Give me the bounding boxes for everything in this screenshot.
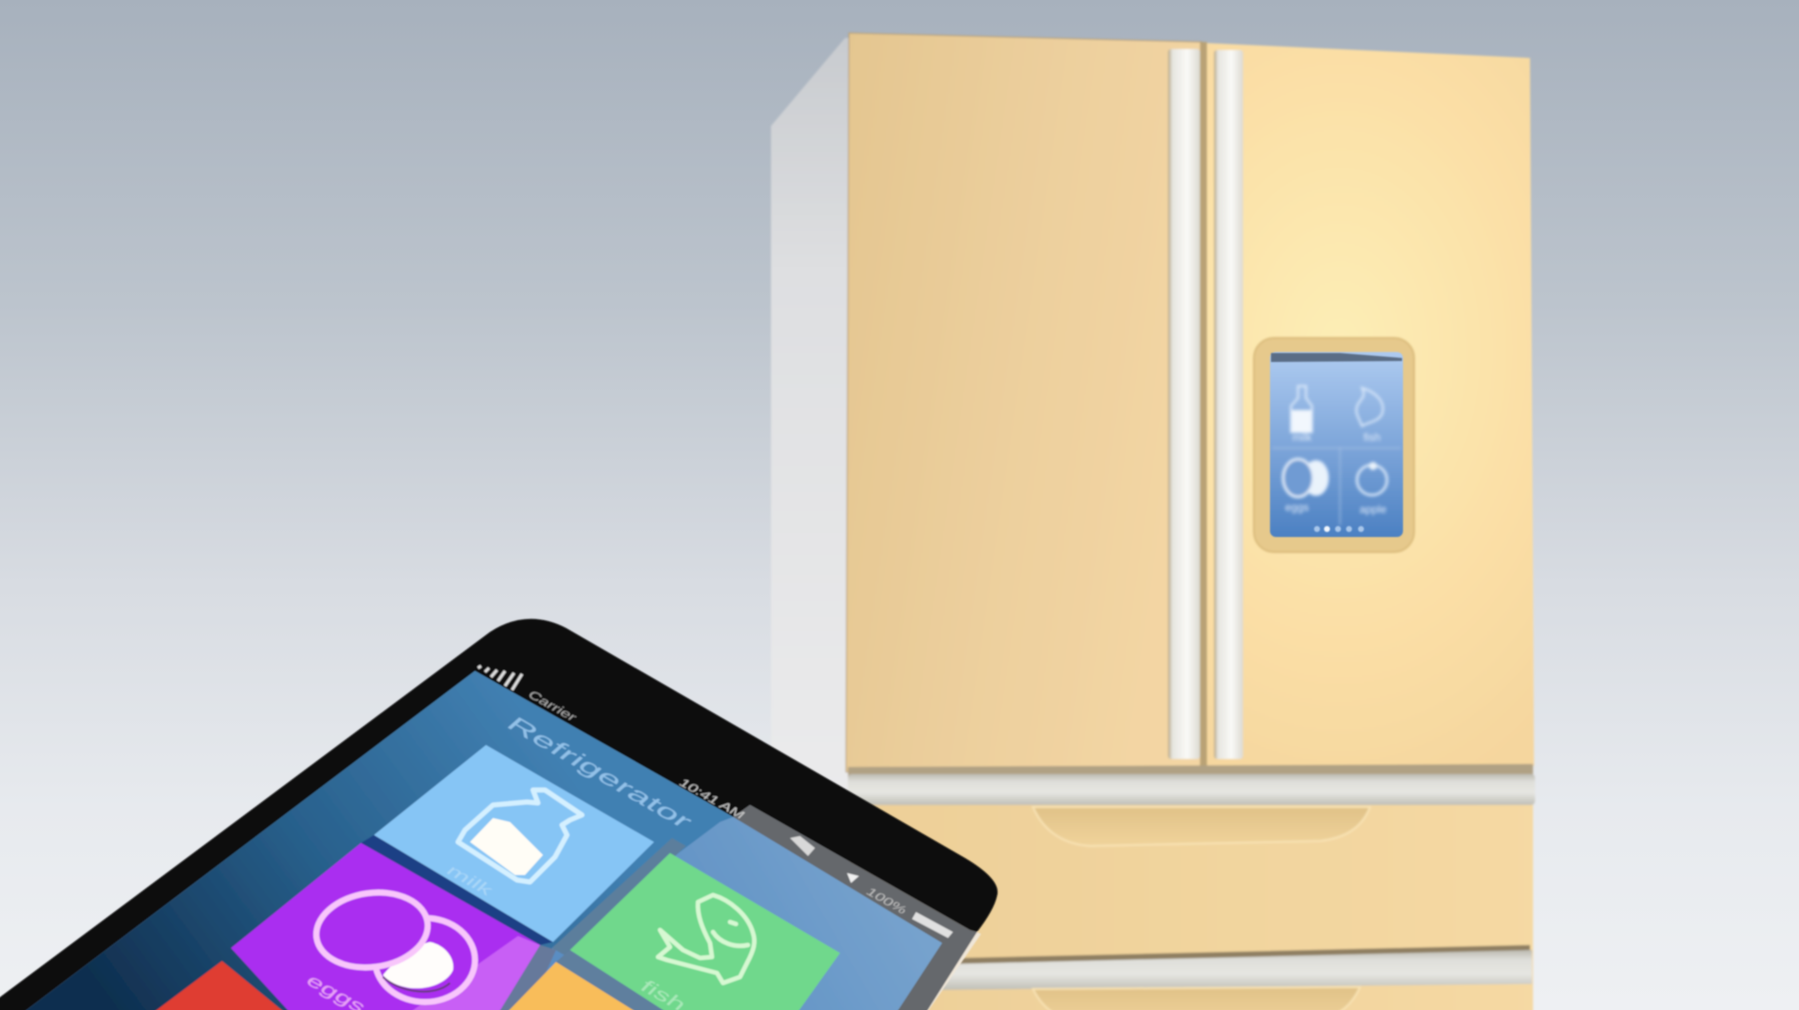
icon: fish <box>1356 388 1383 426</box>
refrigerator side panel <box>771 38 852 810</box>
tile: eggs <box>231 843 540 1010</box>
second drawer shadow line <box>960 945 1530 964</box>
upper drawer recessed handle <box>1033 807 1370 846</box>
status: battery percent: 100% <box>863 886 910 917</box>
right door handle <box>1214 50 1243 759</box>
upper metal bar <box>848 774 1535 805</box>
tablet gray bezel <box>733 805 977 1010</box>
icon: apple <box>1357 462 1387 495</box>
icon: eggs <box>311 886 475 1002</box>
icon: milk bottle <box>1291 386 1312 432</box>
fridge door touchscreen <box>1254 338 1414 552</box>
touchscreen labels: milk <box>1292 432 1312 444</box>
status: wifi <box>790 836 815 856</box>
tablet bezel highlight <box>910 932 981 1010</box>
left door handle <box>1168 49 1200 759</box>
status: location arrow <box>847 873 859 883</box>
egg tile glare <box>385 936 540 1010</box>
lower drawer body <box>850 800 1533 1010</box>
left refrigerator door <box>846 33 1202 772</box>
tile: red <box>130 961 306 1010</box>
tile: fish <box>570 853 840 1010</box>
tablet black body <box>0 619 998 1010</box>
status: carrier: Carrier <box>525 689 579 724</box>
gap strip between milk and fish tiles <box>552 838 686 956</box>
status: battery <box>912 912 953 938</box>
icon: eggs <box>1283 459 1328 497</box>
second metal bar <box>930 950 1532 990</box>
touchscreen contents <box>1272 386 1401 525</box>
touchscreen frame <box>1254 338 1414 552</box>
touchscreen page dots <box>1314 526 1364 532</box>
tile: orange <box>490 962 665 1010</box>
status: time: 10:41 AM <box>676 777 747 821</box>
touchscreen dividers <box>1272 447 1401 525</box>
second drawer recessed handle <box>1033 987 1360 1010</box>
right refrigerator door <box>1206 43 1534 768</box>
label: milk: milk <box>443 862 498 899</box>
icon: fish <box>658 895 754 983</box>
status: signal bars <box>478 666 522 690</box>
tile: milk <box>374 745 654 942</box>
tablet screen <box>0 671 942 1010</box>
tablet screen glare <box>485 817 942 1010</box>
touchscreen display <box>1270 352 1403 537</box>
door shadow line <box>848 764 1533 777</box>
tablet <box>0 619 998 1010</box>
touchscreen labels: apple <box>1360 504 1386 516</box>
icon: milk bottle <box>458 790 582 882</box>
title: Refrigerator: Refrigerator <box>501 712 699 832</box>
refrigerator <box>771 33 1535 1010</box>
touchscreen status bar <box>1271 353 1402 362</box>
gap strip between eggs and orange tiles <box>478 945 556 1010</box>
touchscreen labels <box>1285 432 1386 516</box>
touchscreen labels: eggs <box>1285 502 1309 514</box>
door gap <box>1200 42 1207 768</box>
touchscreen labels: fish <box>1363 432 1381 444</box>
gap strip between milk and eggs tiles <box>361 835 553 945</box>
gap strip between fish and orange tiles <box>556 950 680 1010</box>
